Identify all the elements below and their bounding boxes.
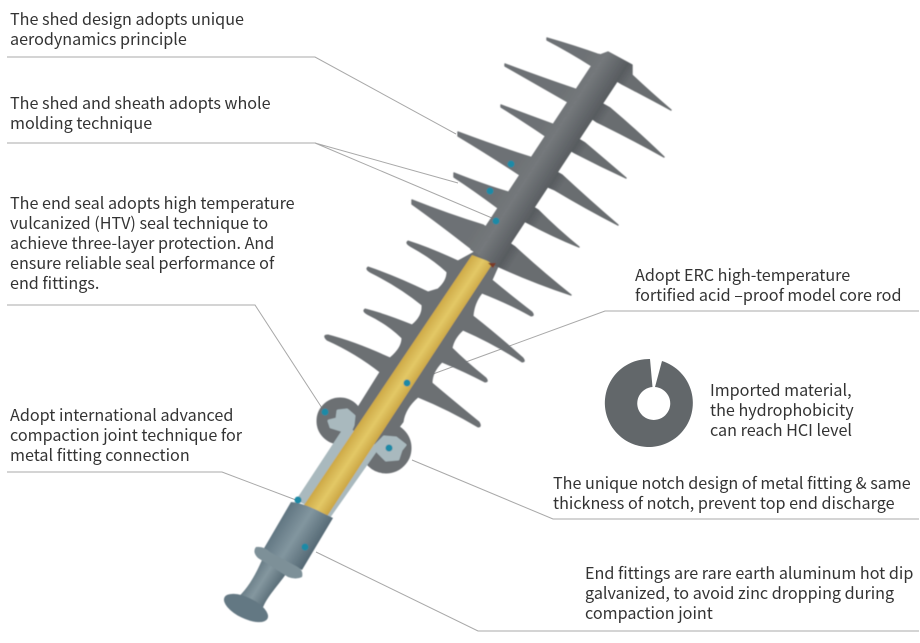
text: end fittings: compaction joint [585,600,713,624]
leader line: shed design [7,57,456,134]
text: shed and sheath: molding technique [10,110,152,134]
callout dots [294,160,514,550]
upper sheath body [483,62,612,258]
text: shed and sheath: The shed and sheath adopts whole [10,90,271,114]
metal end fitting body [263,502,333,570]
leader line: compaction joint [7,472,296,500]
shed 3 [501,105,626,178]
right bulge [361,423,411,473]
icon: notched shed disc [605,359,693,447]
text: end fittings: End fittings are rare earth aluminum hot dip [585,560,913,584]
left bulge [317,398,363,444]
text: core rod: Adopt ERC high-temperature [635,262,850,286]
text: shed design: aerodynamics principle [10,26,187,50]
metal sleeve [296,424,380,518]
rod end mark [488,263,496,268]
right crimp blob [374,437,405,460]
text: imported material: the hydrophobicity [710,397,854,421]
text: notch design: The unique notch design of metal fitting & same [553,470,911,494]
left crimp blob [329,410,354,432]
text: notch design: thickness of notch, prevent top end discharge [553,490,895,514]
text: end seal: achieve three-layer protection. And [10,230,274,254]
text: compaction joint: compaction joint technique for [10,422,243,446]
text: end seal: end fittings. [10,270,99,294]
shed 4 [458,132,618,225]
text: shed design: The shed design adopts unique [10,6,244,30]
text: end seal: The end seal adopts high temperature [10,190,295,214]
leader line: notch design [412,460,919,519]
leader line: core rod [433,311,919,374]
insulator illustration [220,38,671,628]
text: end seal: ensure reliable seal performance of [10,250,275,274]
leader lines: shed and sheath [7,143,492,218]
text: end fittings: galvanized, to avoid zinc dropping during [585,580,894,604]
core rod [304,255,493,518]
text: compaction joint: Adopt international advanced [10,402,233,426]
text: imported material: Imported material, [710,377,852,401]
metal fitting flange [254,547,302,578]
metal fitting head [220,588,272,628]
text: core rod: fortified acid –proof model core rod [635,282,901,306]
lower sheath with sheds [317,241,533,473]
shed 6 [412,200,571,295]
upper sheds [412,38,671,295]
shed 2 [505,64,664,157]
shed 5 [454,173,579,247]
leader line: end fittings [316,552,919,631]
text: end seal: vulcanized (HTV) seal technique to [10,210,268,234]
text: imported material: can reach HCI level [710,417,852,441]
text: compaction joint: metal fitting connection [10,442,190,466]
metal fitting neck [235,560,286,610]
leader line: end seal [7,305,322,408]
shed 1 with cap [547,38,671,110]
